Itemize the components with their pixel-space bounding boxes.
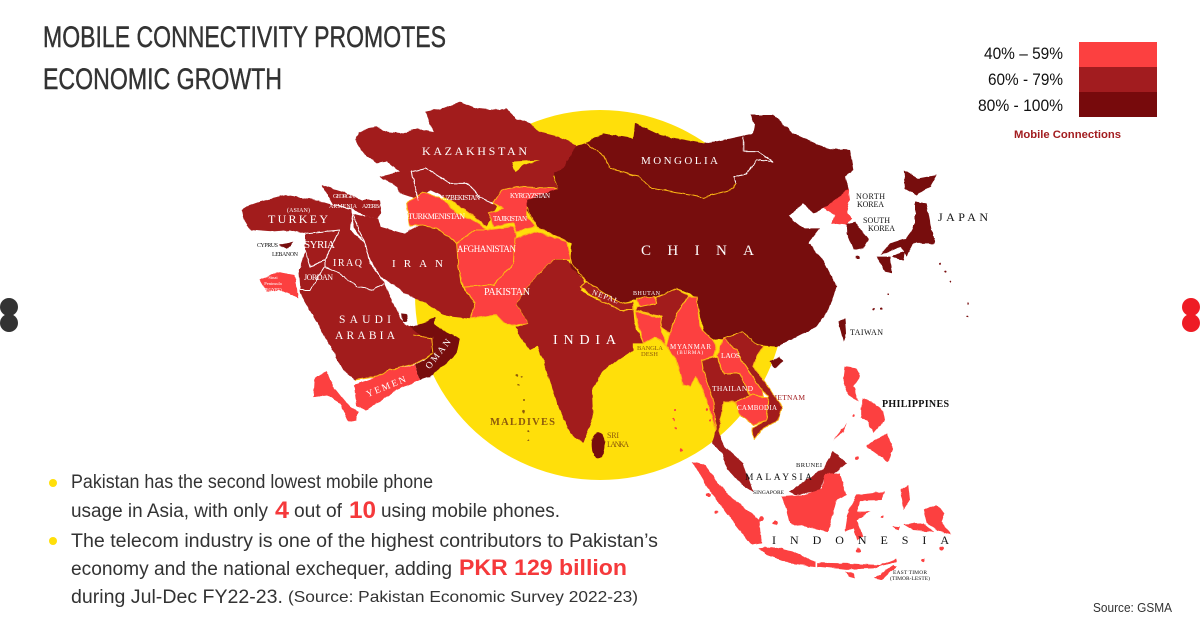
source note: Source: GSMA <box>1093 601 1173 615</box>
country labels: TAIWAN <box>850 328 883 337</box>
country labels: EAST TIMOR <box>893 570 927 576</box>
title <box>43 21 446 96</box>
country labels: BANGLA <box>637 345 663 352</box>
country labels: SYRIA <box>304 239 335 251</box>
legend: mobile connections <box>978 42 1157 141</box>
country labels: TURKEY <box>268 212 328 226</box>
country labels: THAILAND <box>712 384 754 393</box>
country labels: (BURMA) <box>677 351 703 356</box>
country labels: MALDIVES <box>490 417 555 428</box>
country labels: JORDAN <box>304 273 333 282</box>
country labels: BRUNEI <box>796 462 822 469</box>
text: telecom contribution: (Source: Pakistan Economic Survey 2022-23) <box>288 589 638 606</box>
country labels: MALAYSIA <box>745 473 812 483</box>
text: second lowest mobile usage: using mobile phones. <box>381 501 560 522</box>
country labels: KAZAKHSTAN <box>422 144 527 158</box>
country labels: GEORGIA <box>333 194 356 200</box>
country labels: AFGHANISTAN <box>457 244 516 254</box>
country labels: YEMEN <box>365 374 409 400</box>
country labels: Peninsula <box>264 281 282 286</box>
east and southeast Asia countries <box>527 115 969 440</box>
country labels: TAJIKISTAN <box>493 215 527 223</box>
country labels: SOUTH <box>863 216 890 225</box>
map of Asia <box>242 102 988 582</box>
country labels: PAKISTAN <box>484 287 530 298</box>
bullet: mobile usage <box>49 479 57 487</box>
text: telecom contribution <box>71 531 658 608</box>
country labels: ARMENIA <box>329 204 358 210</box>
text: second lowest mobile usage <box>71 472 560 524</box>
country labels: (EGYPT) <box>264 287 282 292</box>
text: telecom contribution: economy and the national exchequer, adding <box>71 559 452 580</box>
country labels: MONGOLIA <box>641 155 718 167</box>
country labels: CHINA <box>641 243 754 259</box>
country labels: LANKA <box>607 440 629 449</box>
text: second lowest mobile usage: 10 <box>349 497 376 524</box>
country labels: LEBANON <box>272 252 299 258</box>
country labels: Sinai <box>268 275 278 280</box>
country labels: SINGAPORE <box>753 490 785 496</box>
country labels: (TIMOR-LESTE) <box>890 575 930 582</box>
country labels: JAPAN <box>938 210 988 224</box>
text: second lowest mobile usage: 4 <box>275 497 290 524</box>
text: second lowest mobile usage: out of <box>294 501 343 522</box>
country labels: SRI <box>607 431 619 440</box>
country labels: ARABIA <box>335 330 396 342</box>
country labels: AZERBAIJAN <box>362 204 394 210</box>
country labels: OMAN <box>424 336 455 371</box>
legend labels: 60% - 79% <box>988 71 1063 89</box>
island Southeast Asia <box>672 367 952 580</box>
left navigation dots <box>0 298 18 332</box>
country labels: VIETNAM <box>769 393 805 402</box>
text: second lowest mobile usage: usage in Asia, with only <box>71 501 268 522</box>
country labels: INDONESIA <box>772 533 949 547</box>
country labels: IRAN <box>392 258 443 270</box>
west and central Asia countries <box>242 102 633 458</box>
country labels: (ASIAN) <box>287 207 310 214</box>
country labels: SAUDI <box>339 314 391 326</box>
country labels: CAMBODIA <box>737 404 777 412</box>
map shapes <box>242 102 969 580</box>
legend labels <box>978 45 1063 115</box>
country labels: BHUTAN <box>633 291 661 297</box>
title: ECONOMIC GROWTH <box>43 63 282 96</box>
country labels: KOREA <box>857 200 884 209</box>
text: telecom contribution: PKR 129 billion <box>459 555 627 580</box>
country labels: LAOS <box>721 351 740 360</box>
text: telecom contribution: during Jul-Dec FY22-23. <box>71 587 283 608</box>
text: second lowest mobile usage: Pakistan has the second lowest mobile phone <box>71 472 433 493</box>
country labels: KOREA <box>868 224 895 233</box>
country labels: KYRGYZSTAN <box>510 192 550 200</box>
country labels: IRAQ <box>333 258 363 269</box>
yellow circle behind map highlighting Pakistan region <box>415 110 785 480</box>
legend swatches <box>1079 42 1157 117</box>
country labels: DESH <box>641 351 658 358</box>
country labels: UZBEKISTAN <box>442 194 480 202</box>
bullet text block <box>49 472 658 608</box>
country labels: MYANMAR <box>670 343 711 351</box>
legend caption: Mobile Connections <box>1014 129 1121 141</box>
country labels: CYPRUS <box>257 243 278 249</box>
right navigation dots <box>1182 298 1200 332</box>
title: MOBILE CONNECTIVITY PROMOTES <box>43 21 446 54</box>
country labels <box>257 144 988 582</box>
legend labels: 40% – 59% <box>984 45 1063 63</box>
country labels: INDIA <box>553 333 617 348</box>
text: telecom contribution: The telecom industry is one of the highest contributors to Pakistan’s <box>71 531 658 552</box>
legend labels: 80% - 100% <box>978 97 1063 115</box>
country labels: TURKMENISTAN <box>408 212 465 221</box>
bullet: telecom industry <box>49 537 57 545</box>
country labels: NORTH <box>856 192 885 201</box>
country labels: PHILIPPINES <box>882 399 949 410</box>
country labels: NEPAL <box>591 288 621 306</box>
